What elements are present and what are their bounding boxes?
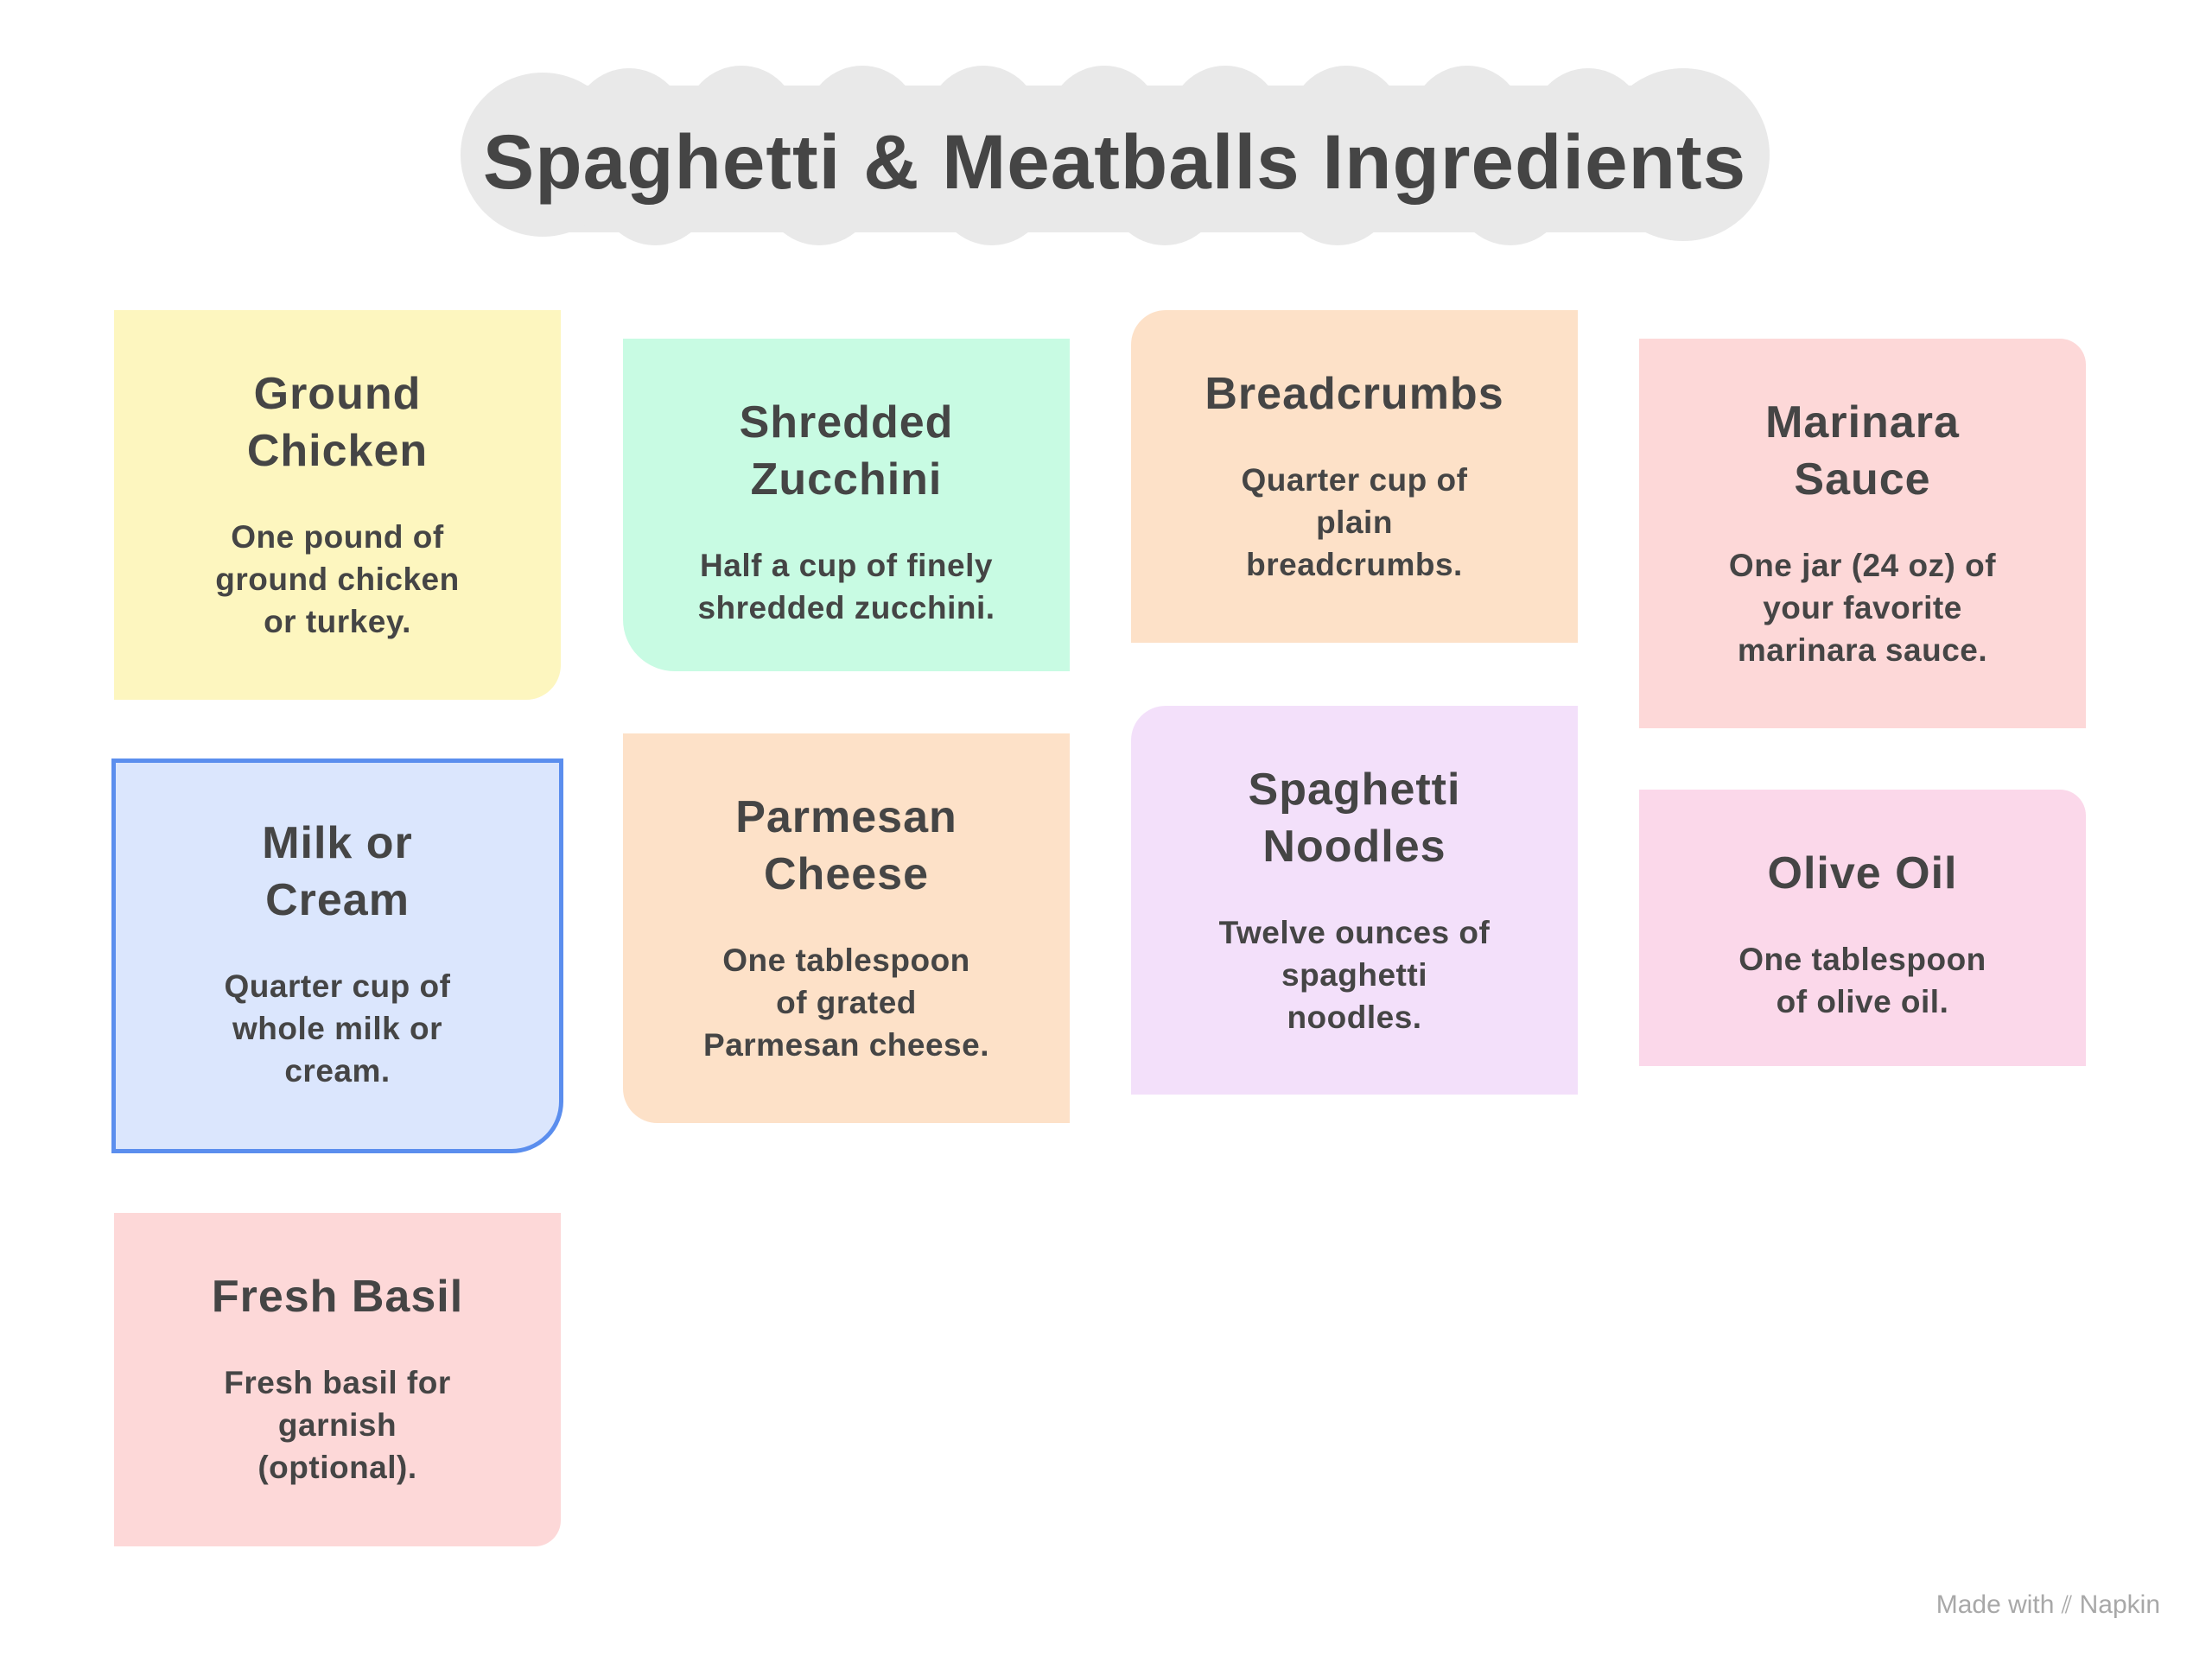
- text: ground chicken: ground chicken: [215, 562, 460, 597]
- heading: zucchini: Zucchini: [751, 454, 942, 505]
- footer: made with napkin: Made with ⫽ Napkin: [1936, 1590, 2160, 1619]
- card: ground chicken: [114, 310, 561, 700]
- text: zucchini: shredded zucchini.: [697, 590, 995, 625]
- text: marinara: marinara sauce.: [1738, 632, 1987, 668]
- card: milk or cream: [111, 759, 563, 1153]
- text: parmesan: [703, 943, 989, 1063]
- text: breadcrumbs: [1242, 462, 1467, 582]
- heading: marinara: [1765, 397, 1960, 505]
- text: spaghetti: noodles.: [1287, 1000, 1422, 1035]
- text: zucchini: [697, 548, 995, 625]
- heading: milk: Milk or: [262, 818, 413, 868]
- title: Spaghetti & Meatballs Ingredients: [483, 118, 1746, 205]
- text: spaghetti: spaghetti: [1281, 957, 1427, 993]
- text: marinara: your favorite: [1763, 590, 1962, 625]
- text: ground chicken: [215, 519, 460, 639]
- heading: marinara: Marinara: [1765, 397, 1960, 447]
- text: parmesan: of grated: [776, 985, 917, 1020]
- heading: zucchini: [740, 397, 953, 505]
- text: marinara: One jar (24 oz) of: [1729, 548, 1996, 583]
- heading: parmesan: Parmesan: [735, 792, 957, 842]
- heading: ground chicken: Ground: [254, 369, 421, 419]
- card: olive oil: [1639, 790, 2086, 1066]
- title cloud: [461, 66, 1770, 245]
- heading: spaghetti: Noodles: [1262, 822, 1446, 872]
- heading: parmesan: Cheese: [764, 849, 929, 899]
- text: milk: Quarter cup of: [225, 968, 450, 1004]
- heading: milk: Cream: [265, 875, 410, 925]
- text: milk: cream.: [284, 1053, 391, 1089]
- text: parmesan: One tablespoon: [722, 943, 970, 978]
- heading: ground chicken: Chicken: [247, 426, 428, 476]
- heading: parmesan: [735, 792, 957, 899]
- heading: spaghetti: [1249, 765, 1460, 872]
- text: basil: garnish: [278, 1407, 397, 1443]
- card: parmesan cheese: [623, 733, 1070, 1123]
- card: spaghetti noodles: [1131, 706, 1578, 1095]
- heading: breadcrumbs: Breadcrumbs: [1205, 369, 1504, 419]
- text: basil: [224, 1365, 451, 1485]
- text: basil: (optional).: [257, 1450, 417, 1485]
- card: breadcrumbs: [1131, 310, 1578, 643]
- text: breadcrumbs: Quarter cup of: [1242, 462, 1467, 498]
- text: olive oil: One tablespoon: [1738, 942, 1986, 977]
- text: spaghetti: Twelve ounces of: [1219, 915, 1490, 950]
- text: breadcrumbs: plain: [1316, 505, 1393, 540]
- text: milk: [225, 968, 450, 1089]
- text: parmesan: Parmesan cheese.: [703, 1027, 989, 1063]
- heading: milk: [262, 818, 413, 925]
- card: fresh basil: [114, 1213, 561, 1546]
- text: milk: whole milk or: [232, 1011, 442, 1046]
- card: marinara sauce: [1639, 339, 2086, 728]
- card: shredded zucchini: [623, 339, 1070, 671]
- text: olive oil: of olive oil.: [1777, 984, 1948, 1019]
- text: ground chicken: One pound of: [231, 519, 444, 555]
- heading: spaghetti: Spaghetti: [1249, 765, 1460, 815]
- heading: ground chicken: [247, 369, 428, 476]
- text: spaghetti: [1219, 915, 1490, 1035]
- heading: olive oil: Olive Oil: [1768, 848, 1957, 898]
- heading: marinara: Sauce: [1794, 454, 1931, 505]
- text: ground chicken: or turkey.: [264, 604, 411, 639]
- heading: basil: Fresh Basil: [212, 1272, 463, 1322]
- text: breadcrumbs: breadcrumbs.: [1246, 547, 1463, 582]
- text: olive oil: [1738, 942, 1986, 1019]
- text: basil: Fresh basil for: [224, 1365, 451, 1400]
- text: zucchini: Half a cup of finely: [700, 548, 993, 583]
- heading: zucchini: Shredded: [740, 397, 953, 447]
- text: marinara: [1729, 548, 1996, 668]
